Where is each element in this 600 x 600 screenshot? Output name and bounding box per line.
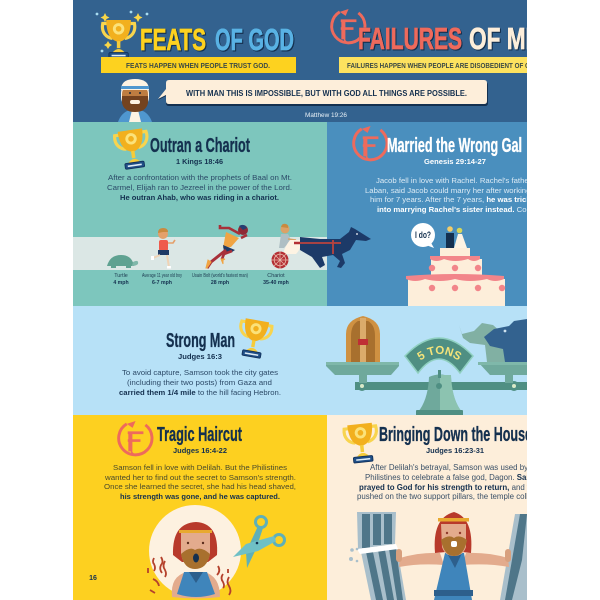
- speed labels: 4 mph: [113, 280, 129, 286]
- reference: 1 Kings: 1 Kings 18:46: [176, 157, 223, 166]
- icon: gauge 5 tons: 5 TONS: [416, 346, 462, 360]
- speech bubble: quote: [158, 80, 488, 106]
- heading: outran a chariot: Outran a Chariot: [150, 135, 250, 157]
- reference: Genesis: Genesis 29:14-27: [424, 157, 486, 166]
- body text: Carmel, Elijah ran to Jezreel in the power of the Lord.: [107, 183, 292, 192]
- speech bubble: quote: WITH MAN THIS IS IMPOSSIBLE, BUT WITH GOD ALL THINGS ARE POSSIBLE.: [186, 89, 467, 98]
- body text: Laban, said Jacob could marry her after working for: [365, 186, 542, 195]
- body text: [104, 463, 296, 501]
- body text: He outran Ahab, who was riding in a chariot.: [120, 193, 279, 202]
- icon: reins and horse: [294, 227, 371, 268]
- icon: sprinter: [206, 225, 248, 268]
- icon: balance scale: [326, 362, 530, 416]
- panel: bringing down the house: [327, 415, 557, 600]
- reference: Judges 16:23-31: Judges 16:23-31: [426, 446, 484, 455]
- page number: 16: [89, 575, 97, 582]
- heading: failures of men: FAILURES: [358, 21, 462, 56]
- heading: feats of god: [141, 28, 294, 52]
- icon: scissors: [233, 516, 284, 568]
- body text: To avoid capture, Samson took the city gates: [122, 368, 278, 377]
- icon: trophy: [114, 128, 151, 170]
- body text: pushed on the two support pillars, the temple collapsed.: [357, 492, 552, 501]
- speed labels: 35-40 mph: [263, 280, 289, 286]
- body text: into marrying Rachel's sister instead. Copied: [377, 205, 541, 214]
- icon: failure F badge: [332, 9, 365, 43]
- icon: speech bubble I do: I do?: [415, 230, 431, 240]
- speed labels: Average 11 year old boy: [142, 273, 182, 279]
- icon: city gate: [346, 316, 380, 362]
- icon: running child: [151, 228, 175, 268]
- speed labels: [113, 273, 289, 286]
- icon: header trophy with sparkles: [96, 11, 148, 58]
- body text: carried them 1/4 mile to the hill facing Hebron.: [119, 388, 281, 397]
- heading: failures of men: [359, 27, 527, 51]
- panel: married the wrong gal: [294, 122, 542, 306]
- icon: right pillar: [500, 514, 530, 600]
- heading: tragic haircut: Tragic Haircut: [157, 424, 242, 446]
- icon: rhinos: [459, 319, 527, 362]
- panel: tragic haircut: [73, 415, 327, 600]
- panel: strong man: [73, 306, 527, 415]
- banner: failures subtitle: [339, 57, 541, 73]
- icon: turtle: [107, 255, 138, 268]
- heading: strong man: Strong Man: [166, 330, 235, 352]
- speed labels: 6-7 mph: [152, 280, 172, 286]
- body text: After a confrontation with the prophets of Baal on Mt.: [108, 173, 292, 182]
- icon: Samson pushing pillars: [396, 512, 511, 600]
- body text: [357, 463, 557, 501]
- body text: Samson fell in love with Delilah. But the Philistines: [113, 463, 287, 472]
- body text: (including their two posts) from Gaza and: [127, 378, 272, 387]
- speed track band: [73, 237, 327, 270]
- icon: shorn Samson in circle: [148, 505, 241, 598]
- body text: Once she learned the secret, she had his head shaved,: [104, 482, 296, 491]
- body text: wanted her to find out the secret to Samson's strength.: [104, 473, 296, 482]
- body text: [107, 173, 292, 202]
- speed labels: Turtle: [114, 273, 128, 279]
- citation: Matthew: Matthew 19:26: [305, 112, 347, 119]
- body text: After Delilah's betrayal, Samson was used by the: [370, 463, 542, 472]
- icon: failure F badge: [354, 126, 387, 160]
- icon: bearded man avatar: [118, 79, 152, 122]
- banner: feats subtitle: [101, 57, 296, 73]
- panel: header banner: [73, 0, 557, 122]
- speed labels: 28 mph: [211, 280, 229, 286]
- body text: Philistines to celebrate a false god, Dagon. Samson: [365, 473, 548, 482]
- speed labels: Chariot: [267, 273, 285, 279]
- body text: [366, 178, 527, 214]
- heading: failures of men: OF MEN: [469, 21, 557, 56]
- banner: feats subtitle: FEATS HAPPEN WHEN PEOPLE TRUST GOD.: [126, 63, 270, 70]
- icon: speech bubble I do: [411, 223, 435, 248]
- heading: feats of god: OF GOD: [215, 22, 294, 57]
- icon: failure F badge: [119, 421, 152, 455]
- reference: Judges 16:3: Judges 16:3: [178, 352, 222, 361]
- heading: feats of god: FEATS: [140, 22, 206, 57]
- body text: him for 7 years. After the 7 years, he was tricked: [370, 195, 540, 204]
- heading: married the wrong gal: Married the Wrong Gal: [387, 135, 522, 157]
- panel: outran a chariot: [73, 122, 327, 306]
- body text: Jacob fell in love with Rachel. Rachel's father,: [376, 176, 533, 185]
- icon: chariot: [272, 224, 300, 268]
- icon: gauge 5 tons: [404, 337, 474, 374]
- body text: prayed to God for his strength to return, and when he: [359, 483, 557, 492]
- body text: [119, 368, 281, 397]
- icon: trophy: [236, 318, 273, 359]
- icon: broken left pillar: [349, 512, 406, 600]
- icon: wedding cake: [406, 226, 505, 306]
- reference: Judges 16:4-22: Judges 16:4-22: [173, 446, 227, 455]
- speed labels: Usain Bolt (world's fastest man): [192, 273, 248, 279]
- icon: trophy: [343, 422, 380, 464]
- body text: his strength was gone, and he was captured.: [120, 492, 280, 501]
- banner: failures subtitle: FAILURES HAPPEN WHEN PEOPLE ARE DISOBEDIENT OF GOD.: [347, 63, 541, 70]
